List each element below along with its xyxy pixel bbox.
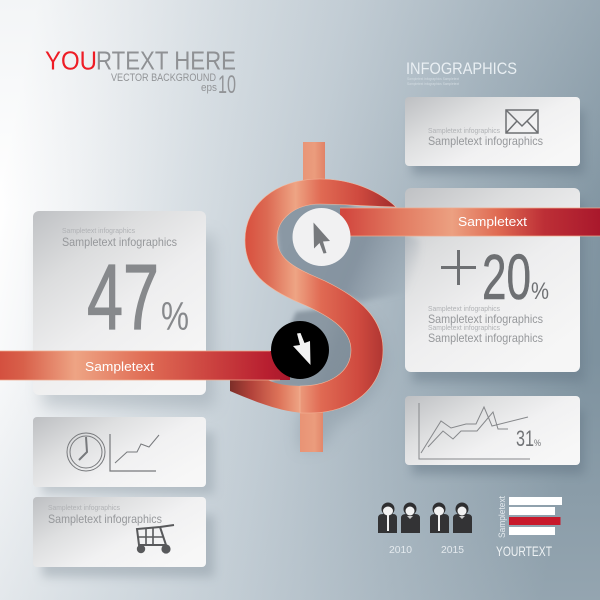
ribbon: right: Sampletext [458,214,527,229]
panel: 47 percent: Sampletext infographics [62,226,135,235]
panel: plus 20 percent: Sampletext infographics [428,331,543,345]
panel: cart: Sampletext infographics [48,503,120,512]
panel: mail: Sampletext infographics [428,126,500,135]
panel: line chart 31 percent [405,396,584,474]
panel: plus 20 percent [405,188,584,382]
person 2015 b [453,502,472,533]
icon: cursor [293,333,310,365]
ribbon: left [0,351,290,380]
people icons: 2010 [389,545,412,556]
people icons: 2015 [441,545,464,556]
panel: 47 percent: % [161,295,189,339]
panel: plus 20 percent: Sampletext infographics [428,304,500,313]
panel: mail: Sampletext infographics [428,134,543,148]
infographics heading: INFOGRAPHICS [406,59,517,78]
title [45,46,236,99]
panel: 47 percent [33,211,214,407]
panel: plus 20 percent: % [531,278,549,305]
title: VECTOR BACKGROUND [111,72,216,84]
icon: cursor [314,222,330,254]
dollar sign shadows [270,202,420,450]
title: RTEXT HERE [96,46,236,76]
panel: cart [33,497,214,577]
bottom tail [230,380,305,413]
panel: cart: Sampletext infographics [48,512,162,526]
dollar sign [230,142,396,452]
bar legend: YOURTEXT [496,543,552,559]
ribbon: left: Sampletext [85,359,154,374]
black cursor button [271,321,329,379]
icon: shopping cart [137,525,174,554]
infographics heading: Sampletext infographics Sampletext [407,77,459,81]
panel: plus 20 percent: Sampletext infographics [428,312,543,326]
panel: mail [405,97,584,174]
panel: clock and chart [33,417,214,494]
panel: plus 20 percent: 20 [482,241,531,313]
person 2010 a [378,502,397,533]
people icons [378,502,472,556]
person 2015 a [430,502,449,533]
panel: 47 percent: 47 [87,245,159,349]
panel: line chart 31 percent: 31 [516,426,534,451]
icon: clock [67,433,105,471]
icon: envelope [506,110,538,133]
infographics heading: Sampletext infographics Sampletext [407,82,459,86]
panel: plus 20 percent: Sampletext infographics [428,323,500,332]
title: YOU [45,46,97,76]
person 2010 b [401,502,420,533]
top stem [303,142,325,184]
title: eps [201,82,217,94]
icon: line chart [110,434,159,471]
panel: line chart 31 percent: % [534,438,541,448]
white cursor button [292,208,350,266]
panel: 47 percent: Sampletext infographics [62,235,177,249]
line chart [419,403,530,459]
bar legend: Sampletext [497,496,507,538]
bar legend [496,496,562,559]
infographics heading [406,59,517,86]
title: 10 [218,71,236,99]
bottom stem [300,408,323,452]
s band [245,179,396,413]
ribbon: right [340,208,600,236]
